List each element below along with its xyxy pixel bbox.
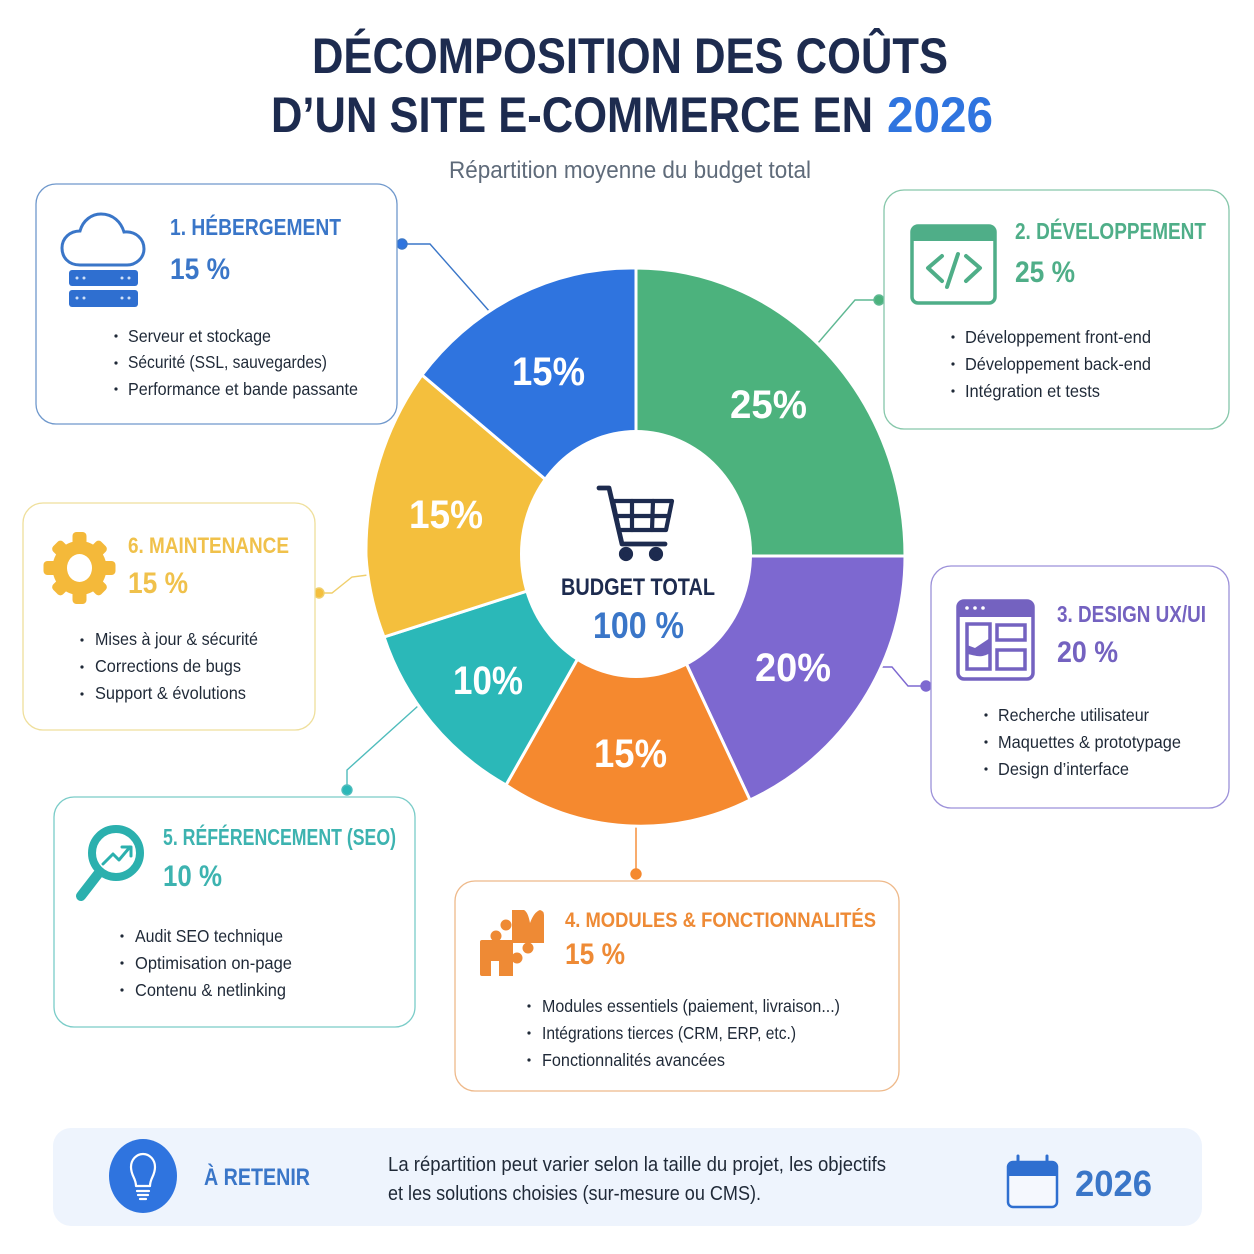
bullet list: Performance et bande passante [128, 379, 358, 399]
icon: puzzle pieces [480, 910, 544, 976]
icon: code window [912, 226, 995, 303]
bullet list: Maquettes & prototypage [998, 732, 1181, 752]
percentage: 15 % [565, 938, 625, 971]
heading: 1. HÉBERGEMENT [170, 213, 341, 240]
percentage: 20 % [1057, 636, 1118, 669]
center label: budget total: BUDGET TOTAL [561, 574, 715, 601]
connector: design [882, 667, 931, 691]
bullet list: Serveur et stockage [128, 326, 271, 346]
slice percentage labels [409, 350, 831, 776]
bullet list [984, 705, 1181, 779]
slice: maintenance 15% [366, 375, 636, 637]
bullet list: Fonctionnalités avancées [542, 1050, 725, 1070]
title: DÉCOMPOSITION DES COÛTS [312, 27, 948, 84]
percentage: 15 % [128, 567, 188, 600]
bullet list [527, 996, 840, 1070]
bullet list: Contenu & netlinking [135, 980, 286, 1000]
bullet list: Intégrations tierces (CRM, ERP, etc.) [542, 1023, 796, 1043]
donut chart [366, 268, 905, 826]
bullet list [951, 327, 1151, 401]
bullet list [114, 326, 358, 399]
heading: 3. DESIGN UX/UI [1057, 601, 1206, 627]
title [271, 27, 993, 143]
subtitle: Répartition moyenne du budget total [449, 157, 811, 184]
icon: cloud server [62, 214, 144, 307]
note text: et les solutions choisies (sur-mesure ou CMS). [388, 1183, 761, 1205]
icon: gear [44, 532, 116, 604]
slice: hébergement 15% [422, 268, 636, 556]
title: 2026 [887, 87, 993, 143]
slice percentage labels: 15% [512, 350, 585, 394]
percentage: 15 % [170, 253, 230, 286]
panel: référencement SEO [54, 797, 415, 1027]
year: 2026 [1075, 1163, 1152, 1204]
heading: 4. MODULES & FONCTIONNALITÉS [565, 909, 876, 932]
bullet list: Optimisation on-page [135, 953, 292, 973]
slice: référencement 10% [384, 556, 636, 785]
slice percentage labels: 10% [453, 659, 523, 703]
connector: hébergement [397, 239, 490, 312]
center hub [520, 430, 752, 678]
heading: 5. RÉFÉRENCEMENT (SEO) [163, 823, 396, 850]
slice percentage labels: 20% [755, 646, 831, 690]
connector: référencement [342, 706, 418, 795]
bullet list [80, 629, 258, 703]
slice: design 20% [636, 556, 905, 800]
heading: 6. MAINTENANCE [128, 533, 289, 558]
bullet list: Modules essentiels (paiement, livraison...) [542, 996, 840, 1016]
bullet list: Audit SEO technique [135, 926, 283, 946]
connector: maintenance [314, 575, 368, 598]
slice: développement 25% [636, 268, 905, 556]
note text: La répartition peut varier selon la taille du projet, les objectifs [388, 1154, 886, 1176]
slice percentage labels: 15% [594, 732, 667, 776]
percentage: 10 % [163, 860, 222, 893]
bullet list: Développement back-end [965, 354, 1151, 374]
connector: développement [818, 295, 884, 343]
bullet list: Mises à jour & sécurité [95, 629, 258, 649]
icon: light bulb [109, 1139, 177, 1213]
bullet list: Support & évolutions [95, 683, 246, 703]
connector: modules [631, 826, 641, 879]
footer banner [53, 1128, 1202, 1226]
center value: 100 %: 100 % [593, 605, 684, 646]
slice percentage labels: 25% [730, 383, 807, 427]
bullet list: Corrections de bugs [95, 656, 241, 676]
bullet list [120, 926, 292, 1000]
icon: calendar [1007, 1156, 1058, 1207]
icon: shopping cart [599, 488, 672, 559]
slice: modules 15% [506, 556, 750, 826]
bullet list: Intégration et tests [965, 381, 1100, 401]
panel: design UX/UI [931, 566, 1229, 808]
heading: 2. DÉVELOPPEMENT [1015, 217, 1206, 244]
slice percentage labels: 15% [409, 493, 483, 537]
bullet list: Développement front-end [965, 327, 1151, 347]
icon: layout window [957, 600, 1034, 679]
panel: modules et fonctionnalités [455, 881, 899, 1091]
title: D’UN SITE E-COMMERCE EN [271, 87, 873, 143]
bullet list: Recherche utilisateur [998, 705, 1149, 725]
icon: magnifier with trend [81, 829, 140, 896]
bullet list: Sécurité (SSL, sauvegardes) [128, 352, 327, 372]
label: à retenir: À RETENIR [204, 1163, 310, 1191]
panel: hébergement [36, 184, 397, 424]
panel: développement [884, 190, 1229, 429]
bullet list: Design d’interface [998, 759, 1129, 779]
note text [388, 1154, 886, 1205]
panel: maintenance [23, 503, 315, 730]
percentage: 25 % [1015, 256, 1075, 289]
